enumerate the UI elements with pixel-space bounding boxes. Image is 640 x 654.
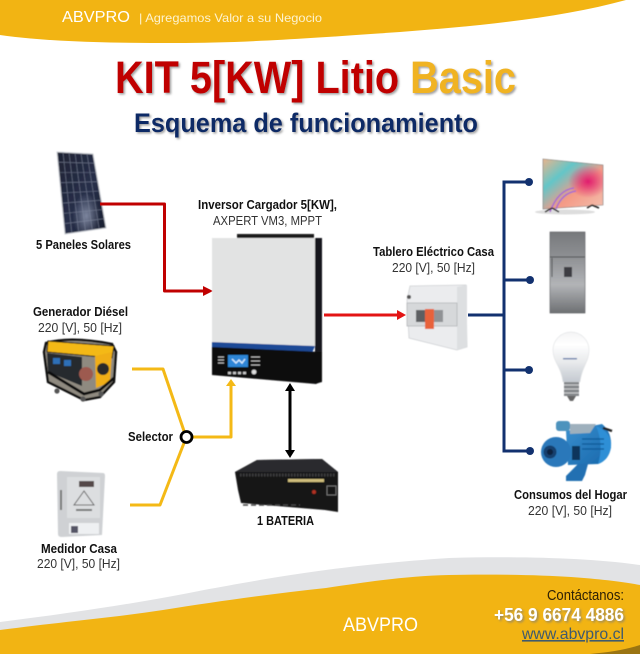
contact block: Contáctanos: (547, 588, 624, 604)
label: inverter: Inversor Cargador 5[KW], (198, 198, 337, 212)
arrow: inverter to battery (285, 383, 295, 458)
header tagline: | Agregamos Valor a su Negocio (139, 11, 322, 25)
icon: refrigerator (550, 232, 585, 313)
connector dots (525, 178, 534, 455)
icon: light bulb (553, 332, 589, 401)
label: meter (37, 542, 120, 571)
contact block: www.abvpro.cl (521, 626, 624, 643)
icon: inverter (212, 234, 322, 384)
label: home loads: Consumos del Hogar (514, 488, 627, 502)
header logo: ABVPRO (62, 9, 130, 26)
header banner (0, 0, 626, 43)
label: meter: Medidor Casa (41, 542, 118, 556)
subtitle: Esquema de funcionamiento (134, 108, 478, 138)
footer banner (0, 557, 640, 654)
arrow: solar to inverter (100, 204, 213, 296)
contact block (494, 588, 624, 643)
label: home loads: 220 [V], 50 [Hz] (528, 504, 612, 518)
label: electrical board (373, 245, 495, 275)
contact block: +56 9 6674 4886 (494, 605, 624, 625)
label: generator: Generador Diésel (33, 305, 128, 319)
icon: solar panel (57, 152, 106, 234)
icon: diesel generator (44, 340, 116, 402)
arrow: inverter to board (324, 310, 406, 320)
consumption wiring (468, 178, 534, 455)
label: generator: 220 [V], 50 [Hz] (38, 321, 122, 335)
label: electrical board: Tablero Eléctrico Casa (373, 245, 495, 259)
icon: electrical board (407, 285, 467, 350)
icon: television (535, 159, 603, 214)
title: KIT 5[KW] Litio Basic (115, 52, 516, 103)
footer logo: ABVPRO (343, 615, 418, 636)
label: battery: 1 BATERIA (257, 514, 314, 528)
label: electrical board: 220 [V], 50 [Hz] (392, 261, 475, 275)
icon: battery (235, 459, 338, 512)
label: selector: Selector (128, 430, 173, 444)
label: inverter: AXPERT VM3, MPPT (213, 214, 322, 228)
icon: water pump (541, 421, 612, 481)
label: solar panels: 5 Paneles Solares (36, 238, 131, 252)
icon: electric meter (57, 471, 105, 537)
label: inverter (198, 198, 337, 228)
label: home loads (514, 488, 627, 518)
label: meter: 220 [V], 50 [Hz] (37, 557, 120, 571)
selector switch (181, 432, 192, 442)
label: generator (33, 305, 128, 335)
selector wiring (130, 369, 236, 505)
